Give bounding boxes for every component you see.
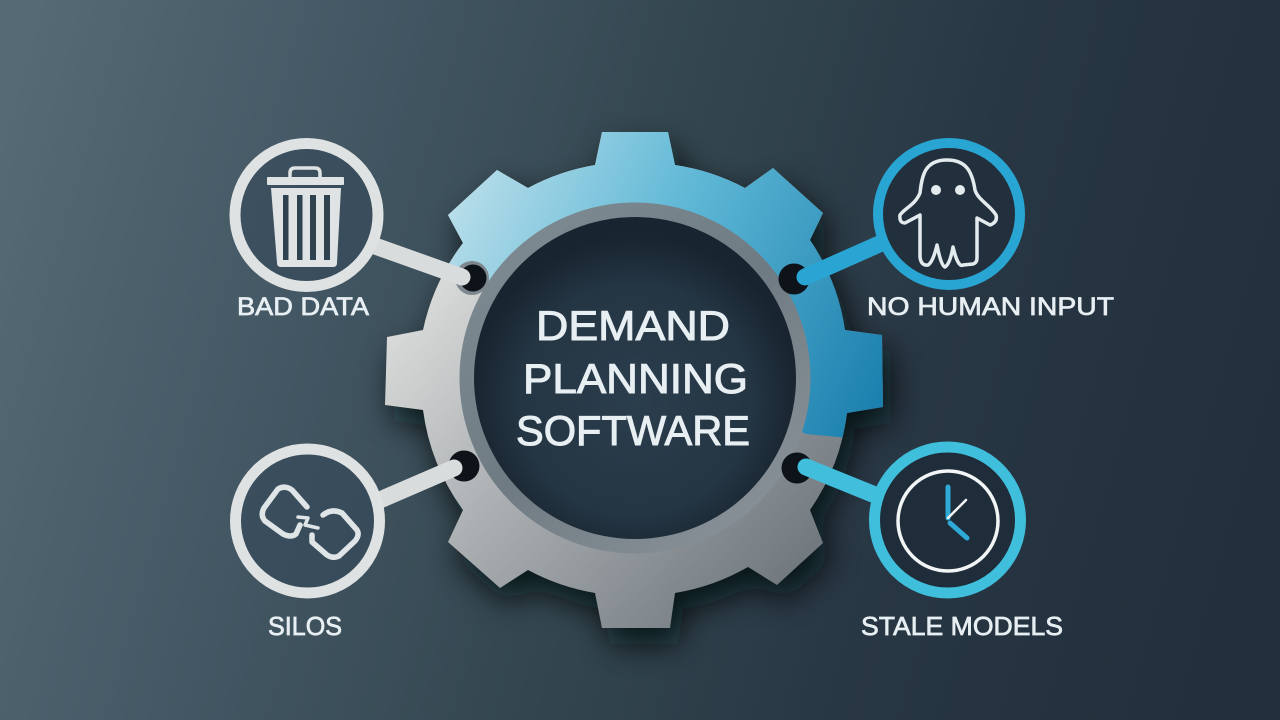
ring: no human input (878, 143, 1020, 285)
icon: ghost (900, 160, 996, 267)
connector: bad data (375, 246, 489, 295)
label: stale models: STALE MODELS (861, 611, 1063, 641)
gear inner ring (467, 210, 803, 546)
callout: silos (236, 449, 480, 641)
connector: no human input (778, 241, 886, 294)
center title: DEMAND (536, 302, 730, 349)
connector: silos (380, 450, 480, 500)
gear body: gray lower section (385, 132, 883, 628)
ring: silos (236, 449, 380, 593)
center title (516, 302, 750, 454)
center title: PLANNING (523, 355, 748, 402)
icon: clock (898, 471, 998, 571)
connector: stale models (782, 452, 880, 497)
center title: SOFTWARE (516, 407, 750, 454)
gear shadow (393, 148, 891, 644)
gear body: blue upper section (448, 132, 883, 438)
label: silos: SILOS (268, 611, 342, 641)
ring: stale models (874, 447, 1020, 593)
gear centre disc (474, 217, 796, 539)
icon: broken chain (262, 487, 358, 557)
callout: stale models (782, 447, 1063, 641)
label: bad data: BAD DATA (237, 293, 369, 321)
callout: bad data (235, 144, 489, 321)
ring: bad data (235, 144, 378, 286)
label: no human input: NO HUMAN INPUT (867, 293, 1114, 321)
icon: trash can (267, 168, 344, 267)
central gear (385, 132, 883, 628)
callout: no human input (778, 143, 1114, 321)
